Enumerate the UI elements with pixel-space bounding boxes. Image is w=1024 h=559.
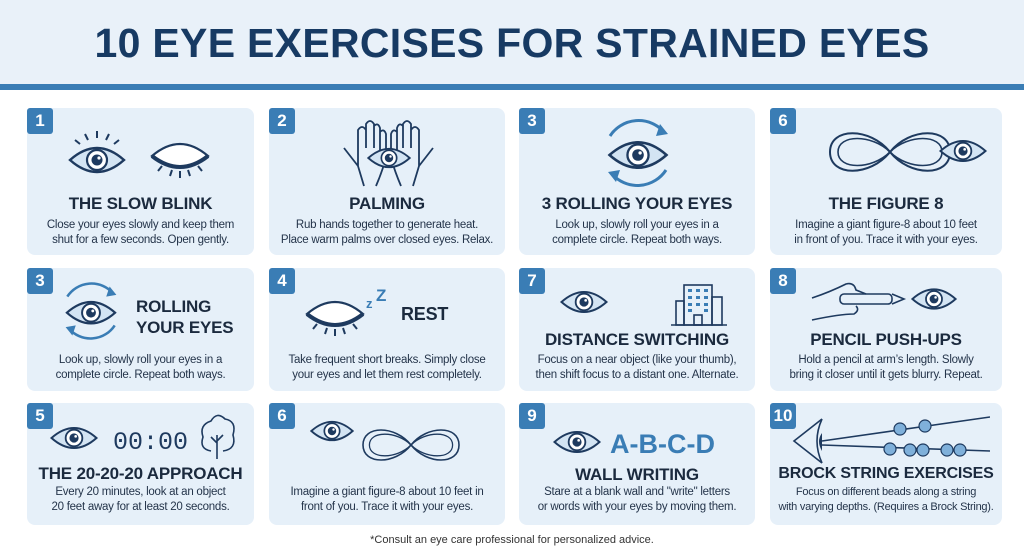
panel: pencil push-ups <box>770 268 1002 391</box>
text: Imagine a giant figure-8 about 10 feet <box>795 219 977 231</box>
heading: YOUR EYES <box>136 318 233 337</box>
text: Close your eyes slowly and keep them <box>47 219 234 231</box>
icon: eye and infinity <box>310 420 460 461</box>
heading: THE SLOW BLINK <box>69 194 212 213</box>
text <box>281 219 493 246</box>
panel: wall writing: 9 <box>527 406 537 425</box>
icon: closed eye with zz: z <box>366 296 373 311</box>
icon: eye with beaded strings <box>792 416 990 464</box>
panel: wall writing <box>519 403 755 525</box>
icon: hands with eye <box>343 120 434 186</box>
icon: hand with pencil and eye <box>812 282 957 321</box>
text: Look up, slowly roll your eyes in a <box>555 219 719 231</box>
text: your eyes and let them rest completely. <box>292 369 482 381</box>
text <box>794 219 978 246</box>
text: complete circle. Repeat both ways. <box>56 369 225 381</box>
header band <box>0 0 1024 84</box>
text <box>47 219 234 246</box>
panel: figure 8: 6 <box>277 406 287 425</box>
text <box>51 486 230 513</box>
text: bring it closer until it gets blurry. Repeat. <box>789 369 983 381</box>
heading: 3 ROLLING YOUR EYES <box>542 194 732 213</box>
icon: open and closed eye <box>68 131 210 178</box>
panel: brock string <box>770 403 1002 525</box>
text: Take frequent short breaks. Simply close <box>288 354 486 366</box>
text: in front of you. Trace it with your eyes. <box>794 234 978 246</box>
icon: eye clock tree: 00:00 <box>113 428 188 457</box>
footnote: *Consult an eye care professional for personalized advice. <box>370 534 654 546</box>
panel: slow blink <box>27 108 254 255</box>
text: then shift focus to a distant one. Alternate. <box>536 369 738 381</box>
text <box>536 354 738 381</box>
panel: brock string: 10 <box>774 406 792 425</box>
icon: rolling eye <box>608 119 668 187</box>
icon: eye with letters <box>553 429 715 459</box>
icon: eye with letters: A-B-C-D <box>610 429 715 459</box>
panel: figure 8 <box>269 403 505 525</box>
icon: closed eye with zz: Z <box>376 286 386 305</box>
heading <box>136 297 233 337</box>
heading: DISTANCE SWITCHING <box>545 330 729 349</box>
text: Imagine a giant figure-8 about 10 feet in <box>290 486 484 498</box>
text: 20 feet away for at least 20 seconds. <box>51 501 230 513</box>
panel: rest: 4 <box>277 271 287 290</box>
heading: BROCK STRING EXERCISES <box>778 465 994 482</box>
heading: REST <box>401 304 448 324</box>
icon: eye and building <box>560 284 727 326</box>
panel: pencil push-ups: 8 <box>778 271 788 290</box>
panel: rolling your eyes <box>27 268 254 391</box>
text: front of you. Trace it with your eyes. <box>301 501 473 513</box>
text <box>288 354 486 381</box>
panel: palming <box>269 108 505 255</box>
heading: ROLLING <box>136 297 211 316</box>
text: Focus on a near object (like your thumb), <box>538 354 736 366</box>
panel: rolling your eyes (top): 3 <box>527 111 537 130</box>
heading: THE 20-20-20 APPROACH <box>39 464 242 483</box>
heading: WALL WRITING <box>575 465 699 484</box>
panel: distance switching <box>519 268 755 391</box>
text <box>789 354 983 381</box>
panel: rest <box>269 268 505 391</box>
panel: 20-20-20 <box>27 403 254 525</box>
text: or words with your eyes by moving them. <box>538 501 736 513</box>
text: Place warm palms over closed eyes. Relax. <box>281 234 493 246</box>
text: Hold a pencil at arm’s length. Slowly <box>798 354 974 366</box>
text <box>552 219 722 246</box>
heading: PENCIL PUSH-UPS <box>810 330 962 349</box>
text <box>778 486 994 513</box>
text: Every 20 minutes, look at an object <box>55 486 226 498</box>
text: with varying depths. (Requires a Brock String). <box>778 501 994 513</box>
panel: palming: 2 <box>277 111 287 130</box>
icon: closed eye with zz <box>305 286 386 336</box>
text <box>538 486 736 513</box>
text: Focus on different beads along a string <box>796 486 976 498</box>
panel: rolling your eyes: 3 <box>35 271 45 290</box>
panel: rolling your eyes (top) <box>519 108 755 255</box>
panel: figure 8 (top): 6 <box>778 111 788 130</box>
text: Look up, slowly roll your eyes in a <box>59 354 222 366</box>
text: shut for a few seconds. Open gently. <box>52 234 229 246</box>
panel: slow blink: 1 <box>35 111 45 130</box>
icon: infinity with eye <box>829 132 987 172</box>
icon: rolling eye <box>65 282 117 340</box>
panel: distance switching: 7 <box>527 271 537 290</box>
panel: figure 8 (top) <box>770 108 1002 255</box>
heading: THE FIGURE 8 <box>829 194 943 213</box>
text: complete circle. Repeat both ways. <box>552 234 722 246</box>
heading: PALMING <box>349 194 425 213</box>
text <box>290 486 484 513</box>
icon: eye clock tree <box>50 414 235 459</box>
text: Rub hands together to generate heat. <box>296 219 478 231</box>
text <box>56 354 225 381</box>
panel: 20-20-20: 5 <box>35 406 45 425</box>
text: Stare at a blank wall and "write" letters <box>544 486 730 498</box>
title: 10 EYE EXERCISES FOR STRAINED EYES <box>94 20 929 66</box>
